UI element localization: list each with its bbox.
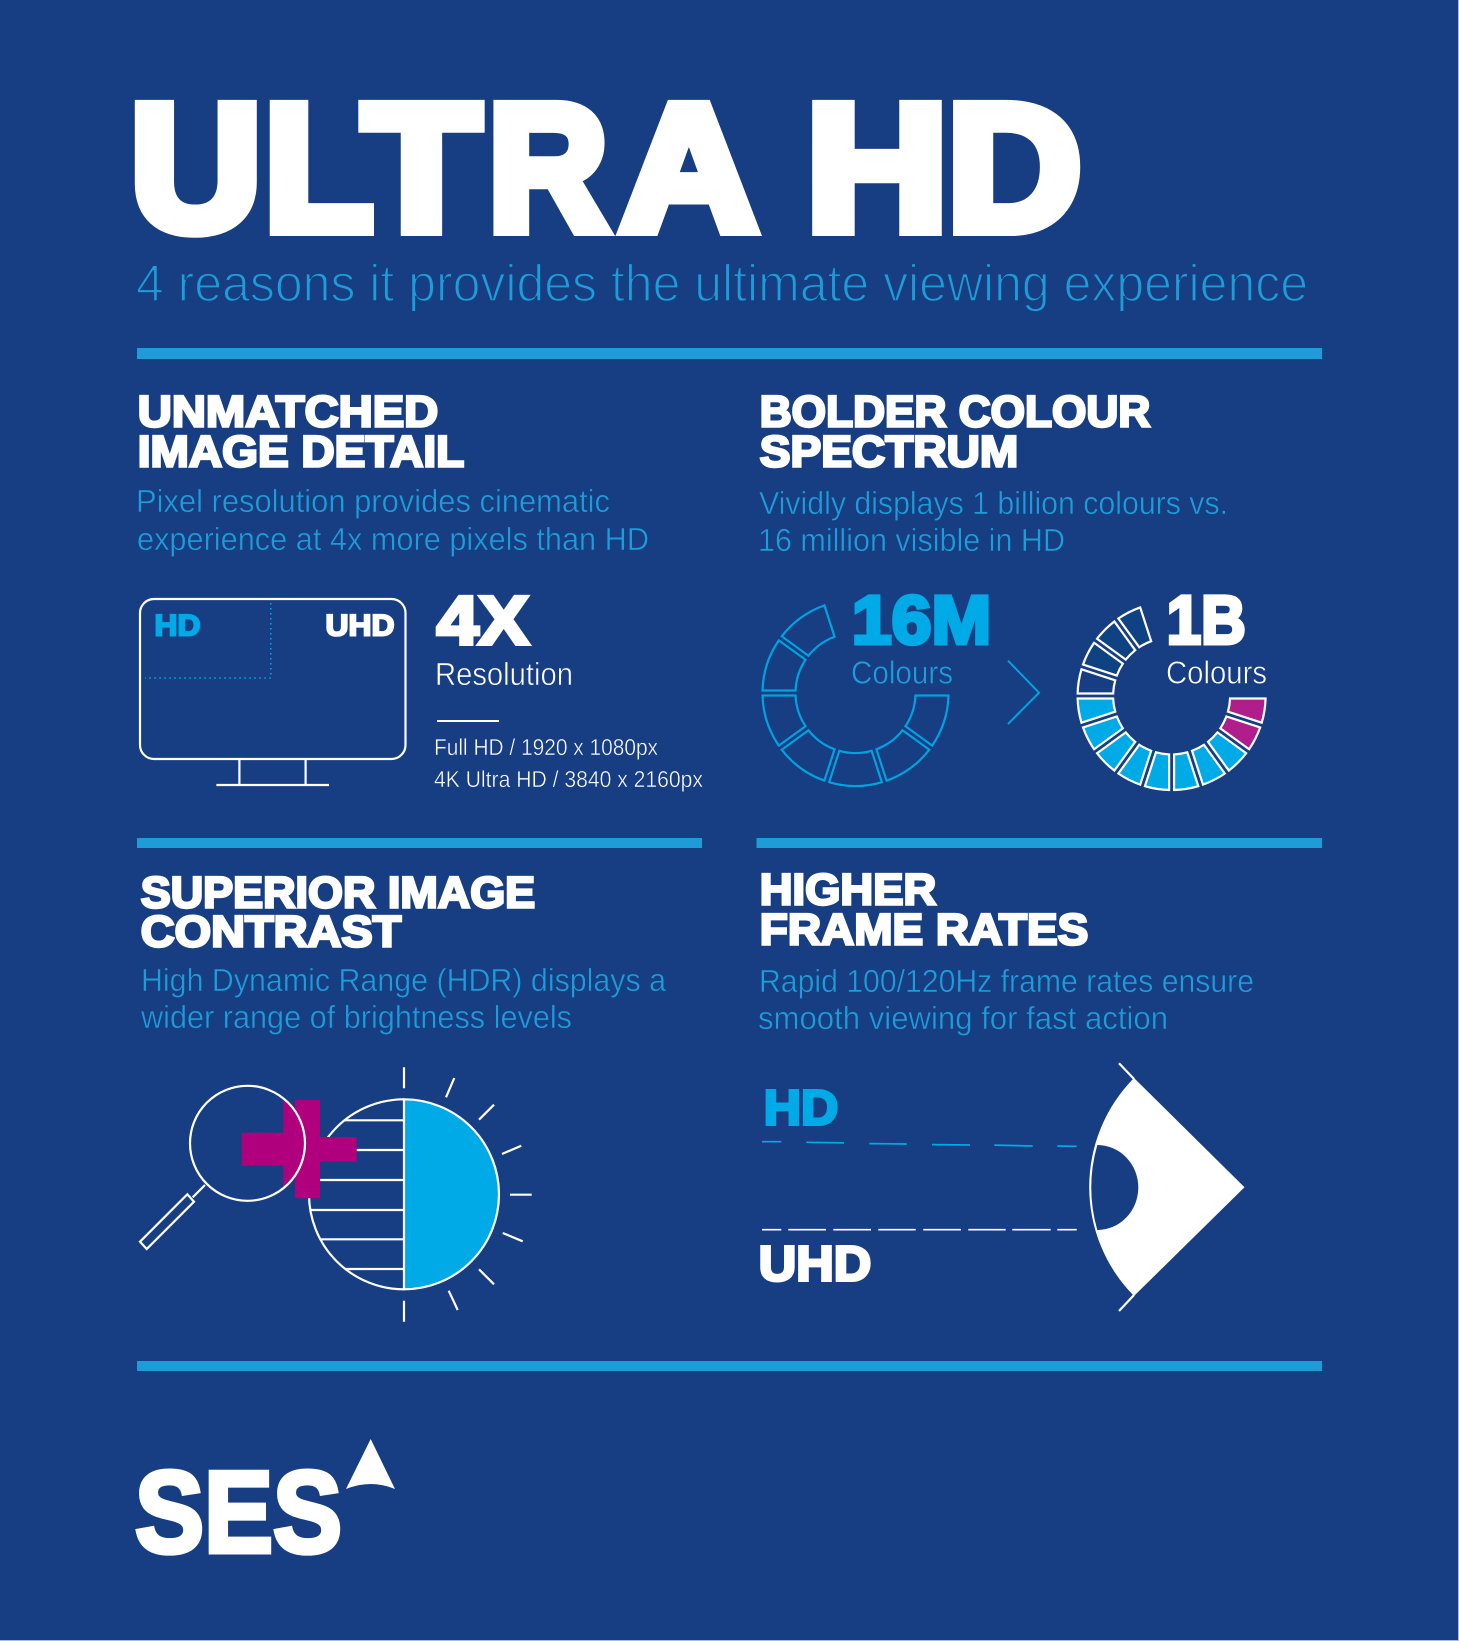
text: pixel resolution description [136, 483, 649, 557]
icon: monitor with HD and UHD areas: UHD [326, 610, 394, 643]
text: frame rate description [758, 963, 1254, 1036]
stat: 1B colours: 1B [1167, 582, 1246, 658]
text: colour description [758, 485, 1228, 558]
heading: bolder colour spectrum: SPECTRUM [760, 428, 1018, 476]
text: HDR description: wider range of brightness levels [140, 999, 572, 1035]
heading: unmatched image detail [138, 388, 464, 476]
label: UHD: UHD [759, 1236, 871, 1292]
title: R [488, 68, 608, 268]
icon: magenta plus under magnifier [242, 1100, 357, 1198]
stat: 1B colours [1166, 582, 1267, 691]
title: L [264, 68, 373, 268]
heading: unmatched image detail: UNMATCHED [138, 388, 438, 436]
label: HD: HD [764, 1080, 838, 1136]
title: A [620, 68, 753, 268]
subtitle: 4 reasons it provides the ultimate viewing experience [136, 255, 1308, 313]
arrow: chevron [1008, 661, 1039, 724]
heading: superior image contrast: SUPERIOR IMAGE [141, 868, 535, 918]
title: T [363, 68, 480, 268]
chart: 16M colour ring [759, 602, 952, 786]
stat: 16M colours: Colours [851, 655, 953, 691]
text: frame rate description: smooth viewing for fast action [758, 1000, 1168, 1036]
stat: 16M colours: 16M [852, 582, 991, 658]
stat: 16M colours [851, 582, 991, 691]
panel: unmatched image detail [136, 388, 703, 792]
stat: 4X resolution: Resolution [435, 656, 573, 692]
heading: higher frame rates: FRAME RATES [760, 906, 1088, 954]
stat: 1B colours: Colours [1166, 655, 1267, 691]
text: frame rate description: Rapid 100/120Hz frame rates ensure [759, 963, 1254, 999]
panel: superior image contrast [140, 868, 666, 1322]
icon: eye [1089, 1063, 1244, 1311]
chart: 1B colour ring [1077, 607, 1266, 791]
heading: superior image contrast: CONTRAST [141, 908, 401, 956]
panel: bolder colour spectrum [758, 388, 1267, 791]
stat: 4X resolution: Full HD / 1920 x 1080px [434, 734, 658, 760]
stat: 4X resolution: 4K Ultra HD / 3840 x 2160px [434, 766, 703, 792]
text: pixel resolution description: experience at 4x more pixels than HD [137, 521, 649, 557]
heading: superior image contrast [141, 868, 535, 956]
title: U [130, 68, 261, 268]
logo: SES: SES [135, 1447, 342, 1577]
text: colour description: Vividly displays 1 billion colours vs. [759, 485, 1228, 521]
text: HDR description: High Dynamic Range (HDR) displays a [141, 962, 666, 998]
heading: higher frame rates: HIGHER [760, 866, 936, 914]
icon: monitor with HD and UHD areas [140, 599, 406, 785]
stat: 4X resolution [434, 582, 703, 792]
chart: sparse HD frame dashes [762, 1142, 1077, 1146]
icon: magnifying glass [140, 1086, 305, 1249]
stat: 4X resolution: 4X [437, 582, 529, 659]
text: colour description: 16 million visible in HD [758, 522, 1065, 558]
heading: bolder colour spectrum [760, 388, 1150, 476]
heading: higher frame rates [760, 866, 1088, 954]
text: pixel resolution description: Pixel resolution provides cinematic [136, 483, 610, 519]
icon: half-lit sun [309, 1067, 532, 1322]
panel: higher frame rates [758, 866, 1254, 1311]
title: H [806, 68, 948, 268]
icon: monitor with HD and UHD areas: HD [154, 610, 200, 643]
chart: dense UHD frame dashes [762, 1229, 1077, 1231]
heading: unmatched image detail: IMAGE DETAIL [138, 428, 464, 476]
text: HDR description [140, 962, 666, 1035]
title: D [947, 68, 1081, 268]
heading: bolder colour spectrum: BOLDER COLOUR [760, 388, 1150, 436]
